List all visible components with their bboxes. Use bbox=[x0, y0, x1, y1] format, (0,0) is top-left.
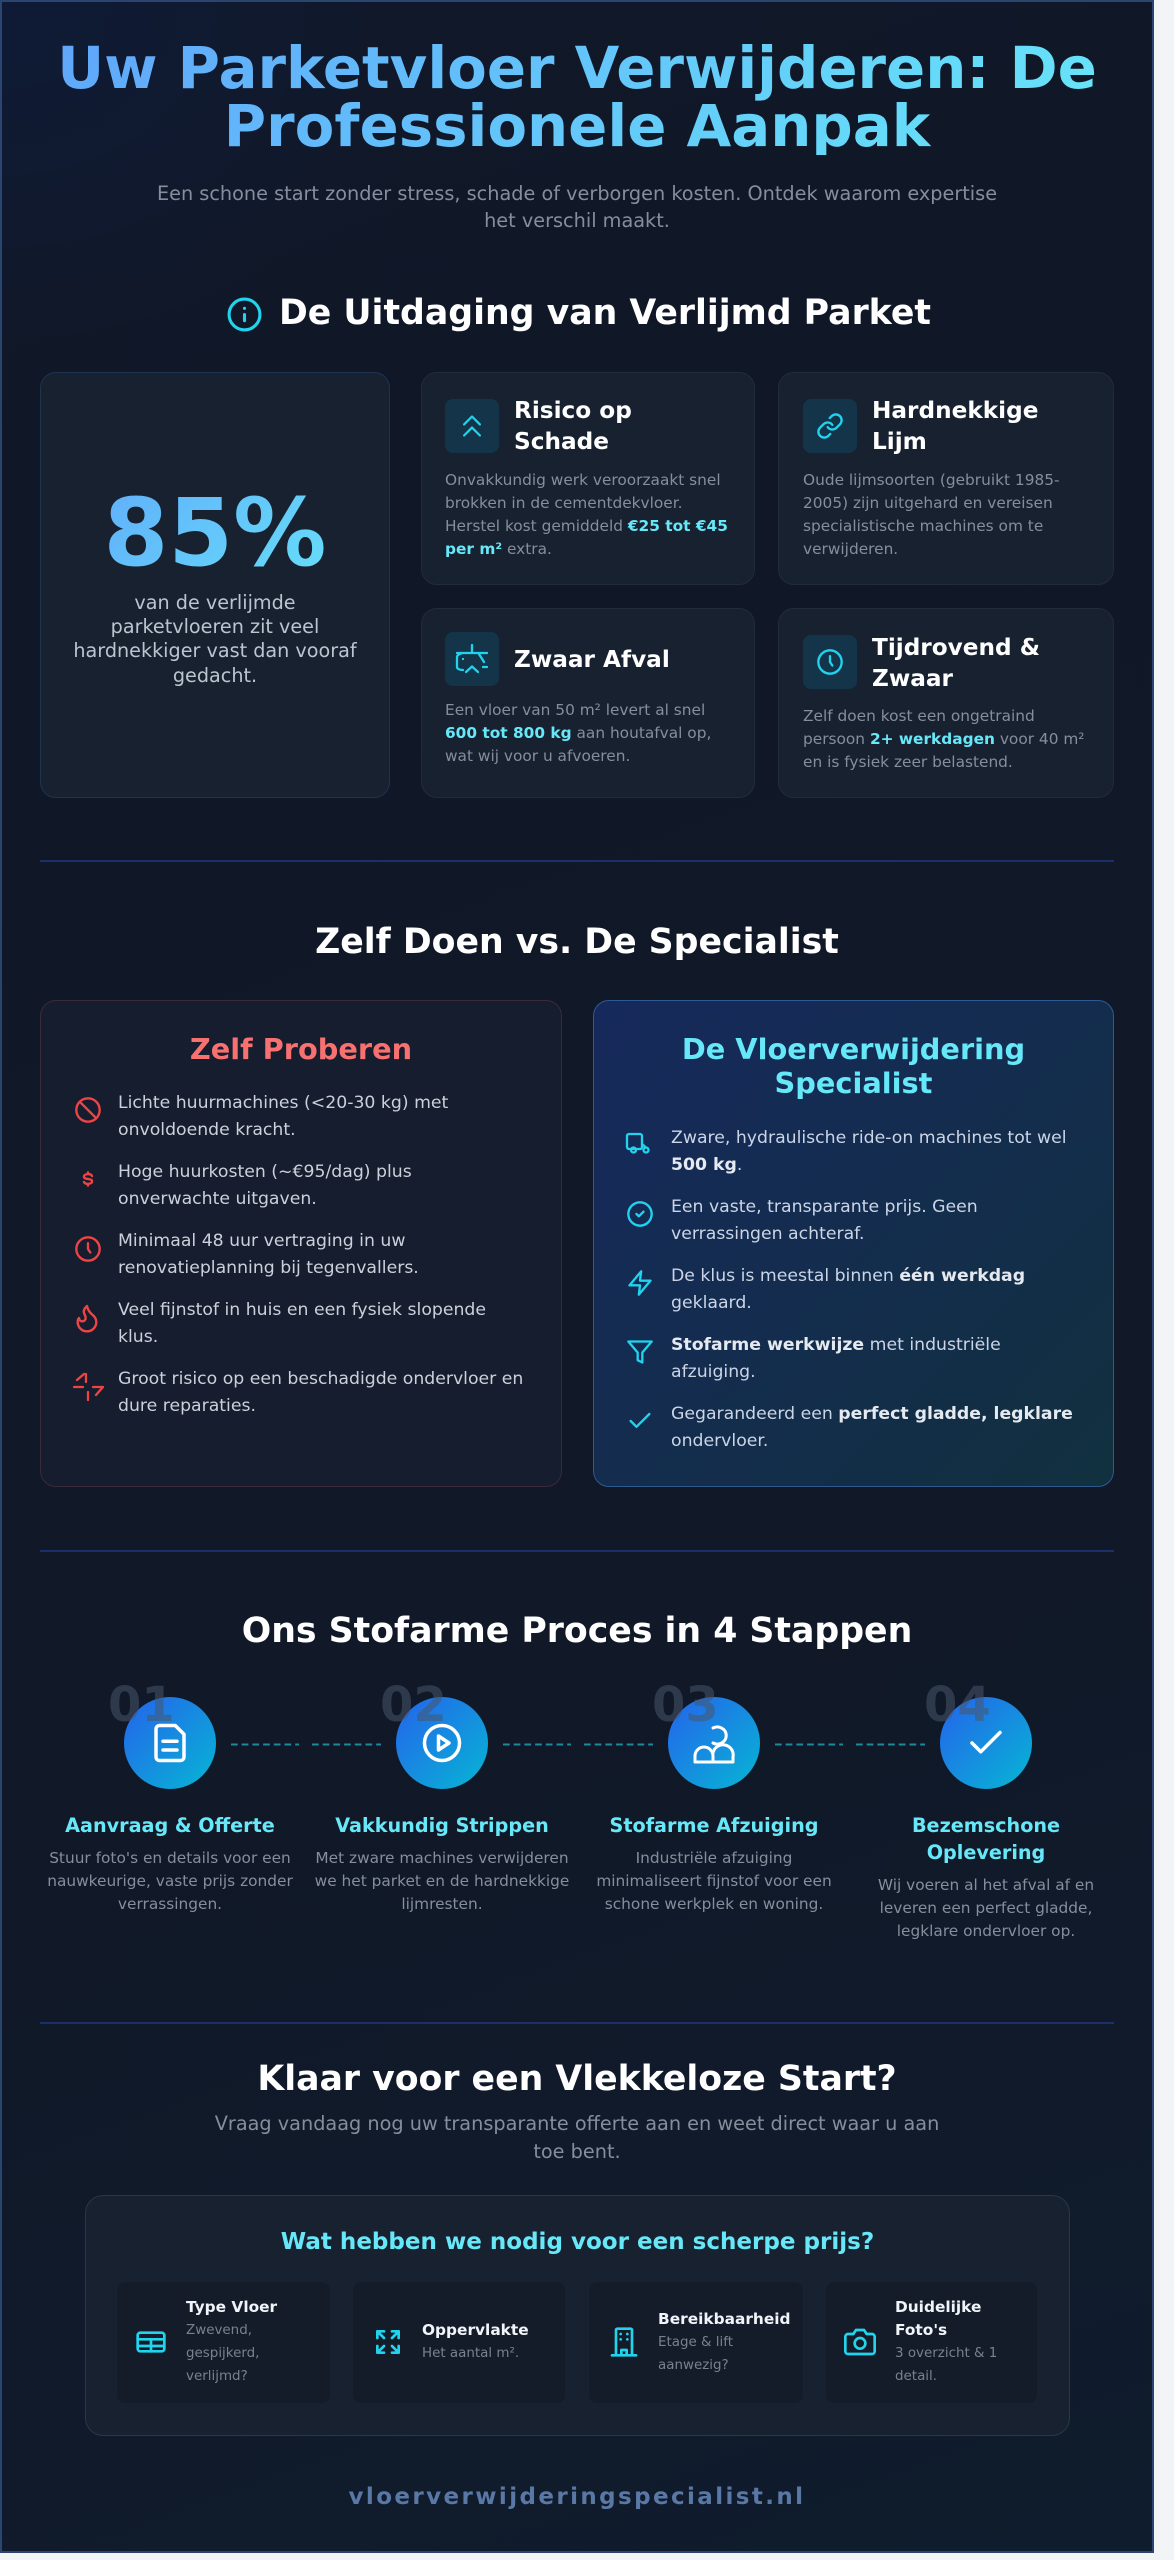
item text: klus. bbox=[118, 1327, 158, 1347]
card text: Zelf doen kost een ongetraind bbox=[803, 707, 1035, 725]
stat text bbox=[73, 591, 357, 687]
stat number bbox=[41, 477, 389, 589]
card text: specialistische machines om te bbox=[803, 517, 1043, 535]
step 4 circle icon bbox=[940, 1697, 1032, 1789]
chip: Duidelijke Foto's bbox=[826, 2282, 1037, 2403]
item text: Hoge huurkosten (~€95/dag) plus bbox=[118, 1162, 412, 1182]
step 1 text bbox=[47, 1849, 293, 1913]
item text bbox=[118, 1093, 448, 1140]
icon: ban bbox=[75, 1097, 101, 1123]
title: Professionele Aanpak bbox=[224, 92, 930, 160]
item text: onvoldoende kracht. bbox=[118, 1120, 296, 1140]
item text: De klus is meestal binnen één werkdag bbox=[671, 1266, 1025, 1286]
card text: verwijderen. bbox=[803, 540, 898, 558]
card title: Tijdrovend & bbox=[872, 634, 1040, 661]
step 4 text bbox=[878, 1876, 1094, 1940]
step 4 title bbox=[912, 1814, 1060, 1864]
subtitle bbox=[157, 182, 997, 232]
item text bbox=[671, 1266, 1025, 1313]
chip text: Duidelijke bbox=[895, 2298, 981, 2316]
panel: De Vloerverwijdering Specialist bbox=[593, 1000, 1114, 1487]
card text: Oude lijmsoorten (gebruikt 1985- bbox=[803, 471, 1060, 489]
card text: per m² extra. bbox=[445, 540, 552, 558]
chip: Type Vloer: Zwevend, bbox=[186, 2323, 252, 2338]
item text: renovatieplanning bij tegenvallers. bbox=[118, 1258, 419, 1278]
section heading: challenge: De Uitdaging van Verlijmd Parket bbox=[279, 293, 931, 333]
icon: info bbox=[228, 298, 262, 332]
icon: funnel bbox=[627, 1340, 653, 1364]
icon: ride-on machine bbox=[626, 1132, 650, 1154]
step 2 text bbox=[315, 1849, 569, 1913]
step 4 text: legklare ondervloer op. bbox=[897, 1922, 1075, 1940]
stat text: gedacht. bbox=[173, 664, 257, 687]
step 4 text: Wij voeren al het afval af en bbox=[878, 1876, 1094, 1894]
card title: Schade bbox=[514, 428, 609, 455]
icon: broken square bbox=[72, 1372, 104, 1402]
connector bbox=[231, 1744, 381, 1746]
panel: Hardnekkige Lijm bbox=[778, 372, 1114, 585]
step 1 number: 01 bbox=[108, 1677, 175, 1733]
card title bbox=[872, 397, 1038, 455]
title: Uw Parketvloer Verwijderen: De bbox=[57, 34, 1097, 102]
item text: Minimaal 48 uur vertraging in uw bbox=[118, 1231, 405, 1251]
item text: Stofarme werkwijze met industriële bbox=[671, 1335, 1001, 1355]
icon: dollar bbox=[82, 1171, 94, 1187]
card text: en is fysiek zeer belastend. bbox=[803, 753, 1013, 771]
step 3 circle icon bbox=[668, 1697, 760, 1789]
item text: onverwachte uitgaven. bbox=[118, 1189, 317, 1209]
step 4 title: Bezemschone bbox=[912, 1814, 1060, 1837]
item text: verrassingen achteraf. bbox=[671, 1224, 864, 1244]
card text: brokken in de cementdekvloer. bbox=[445, 494, 683, 512]
step 2 text: lijmresten. bbox=[401, 1895, 483, 1913]
panel: checklist box bbox=[85, 2195, 1070, 2436]
step 1 text: nauwkeurige, vaste prijs zonder bbox=[47, 1872, 293, 1890]
chip: Bereikbaarheid: aanwezig? bbox=[658, 2358, 729, 2373]
checklist heading: Wat hebben we nodig voor een scherpe prijs? bbox=[281, 2229, 874, 2255]
card text: Herstel kost gemiddeld €25 tot €45 bbox=[445, 517, 728, 535]
icon: table bbox=[135, 2326, 167, 2358]
card title: Risico op bbox=[514, 397, 632, 424]
step 4 text: leveren een perfect gladde, bbox=[880, 1899, 1092, 1917]
connector bbox=[775, 1744, 925, 1746]
card title bbox=[872, 634, 1040, 692]
footer website: vloerverwijderingspecialist.nl bbox=[349, 2484, 805, 2510]
panel: Tijdrovend & Zwaar bbox=[778, 608, 1114, 798]
chip: Type Vloer bbox=[117, 2282, 330, 2403]
stat text: hardnekkiger vast dan vooraf bbox=[73, 639, 357, 662]
chip text bbox=[895, 2296, 981, 2342]
item text: Veel fijnstof in huis en een fysiek slopende bbox=[118, 1300, 486, 1320]
chip text: Bereikbaarheid bbox=[658, 2310, 791, 2328]
item text bbox=[671, 1128, 1067, 1175]
call to action text bbox=[215, 2112, 939, 2163]
step 3 text bbox=[596, 1849, 832, 1913]
item text bbox=[671, 1404, 1073, 1451]
card text: persoon 2+ werkdagen voor 40 m² bbox=[803, 730, 1084, 748]
subtitle: Een schone start zonder stress, schade of verborgen kosten. Ontdek waarom expertise bbox=[157, 182, 997, 205]
item text: Groot risico op een beschadigde ondervloer en bbox=[118, 1369, 523, 1389]
chip: Type Vloer: verlijmd? bbox=[186, 2369, 248, 2384]
connector bbox=[503, 1744, 653, 1746]
panel heading: Zelf Proberen bbox=[190, 1032, 412, 1066]
card text: 600 tot 800 kg aan houtafval op, bbox=[445, 724, 711, 742]
panel heading: De Vloerverwijdering bbox=[682, 1032, 1025, 1066]
card title: Lijm bbox=[872, 428, 927, 455]
icon: clock bbox=[75, 1236, 101, 1262]
card text bbox=[445, 701, 711, 765]
section heading: comparison: Zelf Doen vs. De Specialist bbox=[315, 922, 839, 962]
card title: Zwaar Afval bbox=[514, 646, 670, 673]
panel: Zwaar Afval bbox=[421, 608, 755, 798]
stat text: parketvloeren zit veel bbox=[111, 615, 319, 638]
chip: Oppervlakte: Het aantal m². bbox=[422, 2346, 519, 2361]
subtitle: het verschil maakt. bbox=[484, 209, 670, 232]
step 1 text: verrassingen. bbox=[118, 1895, 222, 1913]
chip text: Foto's bbox=[895, 2321, 947, 2339]
icon: building bbox=[608, 2326, 640, 2358]
chip: Duidelijke Foto's: 3 overzicht & 1 bbox=[895, 2346, 997, 2361]
card text bbox=[803, 707, 1084, 771]
item text: Een vaste, transparante prijs. Geen bbox=[671, 1197, 978, 1217]
step 2 number: 02 bbox=[380, 1677, 447, 1733]
card text: Een vloer van 50 m² levert al snel bbox=[445, 701, 705, 719]
step 2 title: Vakkundig Strippen bbox=[335, 1814, 549, 1837]
icon: broken waste bbox=[445, 632, 499, 686]
step 3 number: 03 bbox=[652, 1677, 719, 1733]
step 1 title: Aanvraag & Offerte bbox=[65, 1814, 275, 1837]
step 1 circle icon bbox=[124, 1697, 216, 1789]
icon: clock bbox=[803, 635, 857, 689]
item text: afzuiging. bbox=[671, 1362, 756, 1382]
item text: Zware, hydraulische ride-on machines tot wel bbox=[671, 1128, 1067, 1148]
step 3 text: Industriële afzuiging bbox=[636, 1849, 792, 1867]
chip: Type Vloer: gespijkerd, bbox=[186, 2346, 259, 2361]
item text: dure reparaties. bbox=[118, 1396, 256, 1416]
stat number: 85% bbox=[103, 478, 327, 587]
icon: bolt bbox=[628, 1270, 652, 1296]
card text: 2005) zijn uitgehard en vereisen bbox=[803, 494, 1053, 512]
item text: ondervloer. bbox=[671, 1431, 768, 1451]
chip text: Type Vloer bbox=[186, 2298, 277, 2316]
card text bbox=[803, 471, 1060, 558]
chip: Duidelijke Foto's: detail. bbox=[895, 2369, 937, 2384]
item text bbox=[671, 1197, 978, 1244]
icon: link bbox=[803, 399, 857, 453]
panel: 85% stat bbox=[40, 372, 390, 798]
panel heading: Specialist bbox=[775, 1066, 932, 1100]
item text bbox=[118, 1231, 419, 1278]
icon: flame bbox=[76, 1304, 98, 1332]
item text bbox=[118, 1300, 486, 1347]
section heading: call to action: Klaar voor een Vlekkeloze Start? bbox=[257, 2059, 897, 2099]
step 2 text: Met zware machines verwijderen bbox=[315, 1849, 569, 1867]
panel heading bbox=[682, 1032, 1025, 1100]
card title bbox=[514, 397, 632, 455]
panel: Risico op Schade bbox=[421, 372, 755, 585]
item text: 500 kg. bbox=[671, 1155, 742, 1175]
card text: wat wij voor u afvoeren. bbox=[445, 747, 630, 765]
step 3 title: Stofarme Afzuiging bbox=[610, 1814, 818, 1837]
stat text: van de verlijmde bbox=[134, 591, 296, 614]
card title: Hardnekkige bbox=[872, 397, 1038, 424]
step 4 number: 04 bbox=[924, 1677, 991, 1733]
chip: Oppervlakte bbox=[353, 2282, 565, 2403]
item text bbox=[118, 1162, 412, 1209]
section heading: process: Ons Stofarme Proces in 4 Stappen bbox=[242, 1611, 912, 1651]
step 4 title: Oplevering bbox=[927, 1841, 1045, 1864]
icon: chevrons up bbox=[445, 399, 499, 453]
icon: expand arrows bbox=[372, 2326, 404, 2358]
panel: Zelf Proberen bbox=[40, 1000, 562, 1487]
item text: Lichte huurmachines (<20-30 kg) met bbox=[118, 1093, 448, 1113]
item text: Gegarandeerd een perfect gladde, legklare bbox=[671, 1404, 1073, 1424]
chip text: Oppervlakte bbox=[422, 2321, 529, 2339]
chip: Bereikbaarheid: Etage & lift bbox=[658, 2335, 733, 2350]
card title: Zwaar bbox=[872, 665, 953, 692]
call to action text: toe bent. bbox=[533, 2140, 621, 2163]
step 1 text: Stuur foto's en details voor een bbox=[49, 1849, 291, 1867]
card text: Onvakkundig werk veroorzaakt snel bbox=[445, 471, 721, 489]
item text: geklaard. bbox=[671, 1293, 752, 1313]
icon: check bbox=[630, 1412, 650, 1428]
icon: camera bbox=[844, 2326, 876, 2358]
title bbox=[40, 40, 1114, 155]
icon: circle check bbox=[627, 1201, 653, 1227]
step 3 text: schone werkplek en woning. bbox=[605, 1895, 823, 1913]
step 2 circle icon bbox=[396, 1697, 488, 1789]
step 3 text: minimaliseert fijnstof voor een bbox=[596, 1872, 832, 1890]
call to action text: Vraag vandaag nog uw transparante offerte aan en weet direct waar u aan bbox=[215, 2112, 939, 2135]
chip: Bereikbaarheid bbox=[589, 2282, 803, 2403]
item text bbox=[671, 1335, 1001, 1382]
step 2 text: we het parket en de hardnekkige bbox=[315, 1872, 569, 1890]
item text bbox=[118, 1369, 523, 1416]
card text bbox=[445, 471, 728, 558]
